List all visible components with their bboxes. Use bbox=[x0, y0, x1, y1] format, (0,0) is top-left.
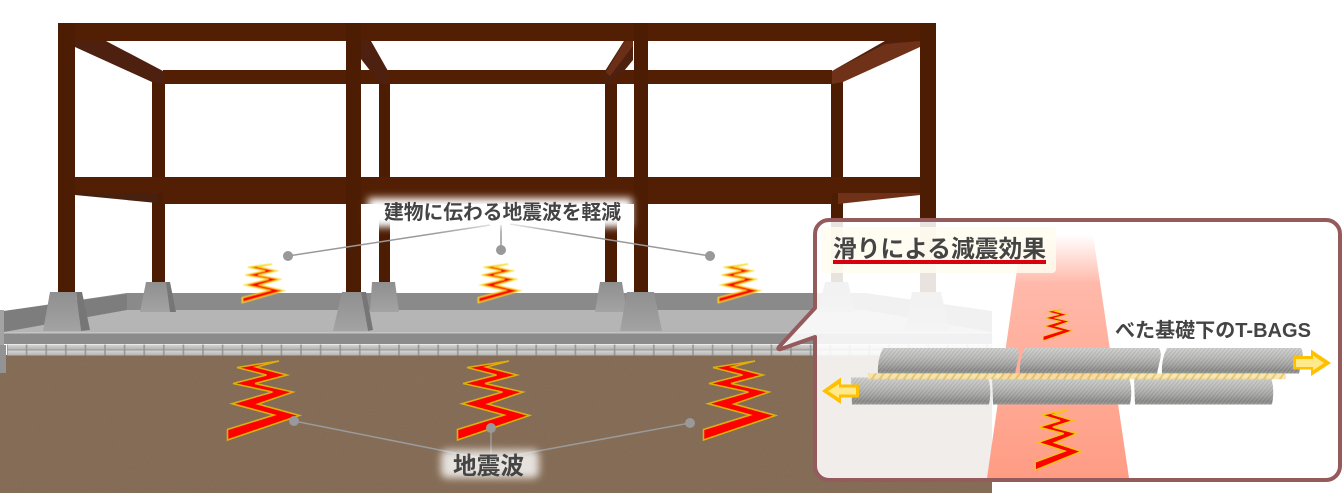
label halo: ground bbox=[441, 450, 539, 478]
label: seismic waves: 地震波 bbox=[453, 453, 524, 480]
sliding layer between bags bbox=[868, 373, 1286, 379]
concrete footings bbox=[43, 282, 950, 331]
label: reduced seismic waves in the building: 建物に伝わる地震波を軽減 bbox=[384, 201, 621, 224]
label halo: building bbox=[368, 198, 632, 227]
upper row of T-BAGS bbox=[878, 348, 1303, 374]
gravel layer: T-BAGS under the slab bbox=[7, 344, 992, 356]
steel frame: beams and braces bbox=[58, 23, 936, 204]
ground bbox=[0, 355, 992, 493]
callout border bbox=[778, 220, 1340, 480]
building seismic waves (reduced) bbox=[242, 264, 760, 303]
steel frame: front columns bbox=[58, 23, 936, 293]
leader lines: ground label bbox=[289, 416, 695, 458]
label: T-BAGS under the mat foundation: べた基礎下のT-BAGS bbox=[1115, 319, 1311, 342]
ground seismic waves bbox=[228, 361, 776, 440]
callout title block: 滑りによる減震効果 bbox=[833, 236, 1046, 263]
steel frame: rear columns bbox=[152, 82, 843, 283]
callout panel fill bbox=[778, 220, 1340, 480]
arrow: left bbox=[822, 378, 859, 404]
panel waves bbox=[1035, 309, 1081, 470]
arrow: right bbox=[1293, 350, 1331, 376]
callout title block bbox=[821, 227, 1056, 273]
lower row of T-BAGS bbox=[851, 378, 1273, 404]
leader lines: building label bbox=[283, 224, 715, 261]
light shaft of seismic energy bbox=[987, 235, 1129, 478]
foundation slab bbox=[0, 293, 992, 373]
